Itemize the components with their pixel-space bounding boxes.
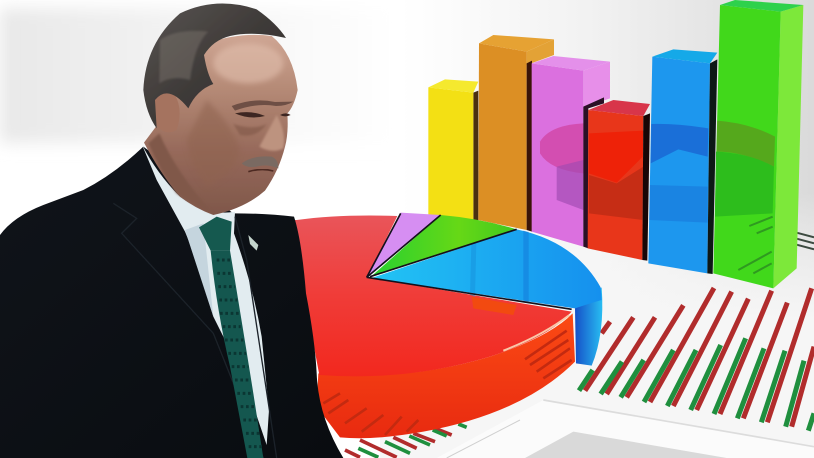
- 3D bar chart: [428, 0, 803, 288]
- forehead highlight: [213, 43, 283, 83]
- ear: [153, 92, 180, 132]
- pie slice dividers: [367, 213, 572, 309]
- top-right chart lines: [797, 233, 814, 249]
- pie side stripes: [323, 331, 572, 435]
- pie top: purple slice: [369, 213, 441, 275]
- suit jacket: [0, 147, 343, 458]
- necktie: [199, 217, 263, 458]
- pie chart: [290, 213, 602, 438]
- face and neck: [144, 35, 298, 215]
- bar: red: [588, 100, 650, 261]
- bar: purple: [532, 56, 610, 248]
- lapel pin: [248, 235, 258, 251]
- bar: orange: [478, 35, 554, 232]
- hair: [143, 4, 286, 128]
- grey panel on paper: [525, 432, 727, 458]
- pie top: blue slice: [372, 229, 602, 308]
- shirt: [142, 144, 269, 445]
- pie rim highlight: [503, 315, 569, 351]
- head: [143, 4, 298, 215]
- brow: [232, 100, 293, 111]
- paper with chart sheet: [437, 233, 814, 458]
- mouth: [248, 169, 273, 172]
- mustache: [242, 156, 278, 168]
- nose: [259, 115, 284, 151]
- man in suit: [0, 4, 343, 458]
- jacket lapel edges: [113, 203, 277, 458]
- cheek shadow: [187, 100, 240, 187]
- lower left lines: [345, 428, 452, 457]
- pie side: red: [317, 313, 575, 438]
- bar: green: [713, 0, 803, 288]
- pie top: red slice: [290, 215, 572, 376]
- eye: [235, 112, 291, 117]
- pie top: green slice: [372, 215, 517, 276]
- bar: yellow: [428, 79, 478, 227]
- line chart: red and green diagonal bars: [345, 288, 814, 457]
- bar: blue: [648, 49, 717, 274]
- pie side: blue: [575, 287, 602, 366]
- neck shadow: [148, 133, 213, 213]
- under-eye shadow: [233, 124, 267, 136]
